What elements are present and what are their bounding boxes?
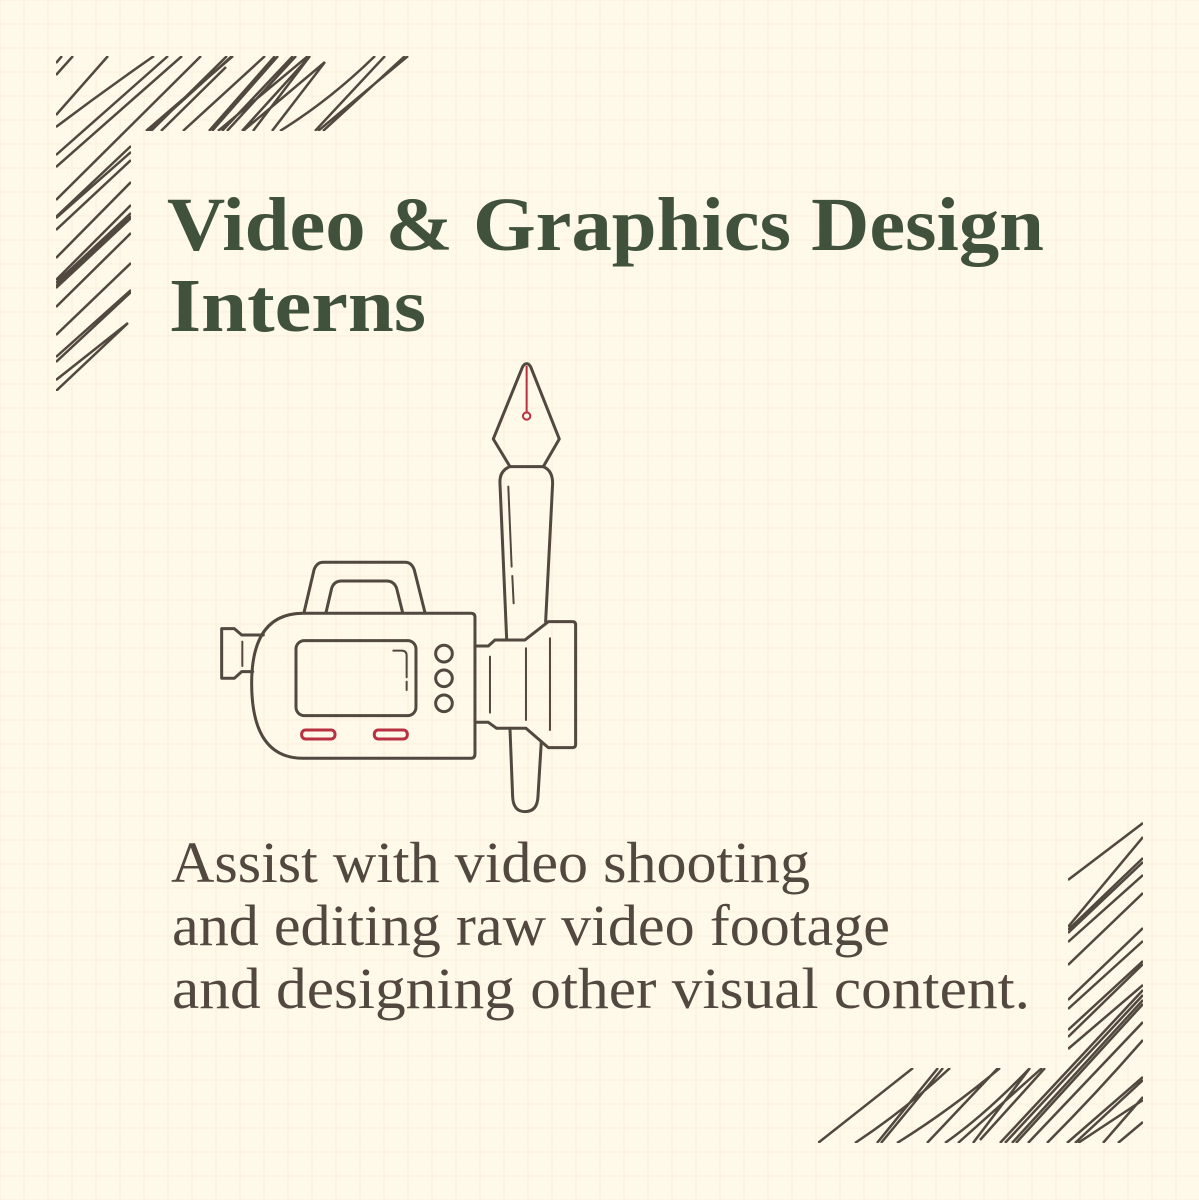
decorative hatch corner: top left (56, 56, 408, 391)
pen nib slit (523, 367, 530, 420)
pen barrel highlights (508, 487, 514, 603)
title: Video & Graphics Design (167, 183, 1044, 267)
icon: video camera and pen nib (222, 364, 576, 812)
body text (171, 830, 1030, 1021)
camera handle (304, 562, 425, 613)
camera eyepiece (222, 629, 263, 678)
body text: and designing other visual content. (172, 956, 1030, 1021)
camera buttons (436, 645, 452, 712)
camera lens (475, 622, 576, 748)
pen nib (493, 364, 559, 467)
title: Interns (169, 264, 426, 348)
screen glare (393, 651, 407, 690)
title (167, 183, 1044, 348)
body text: Assist with video shooting (171, 830, 810, 895)
pen barrel (500, 467, 553, 812)
decorative hatch corner: bottom right (818, 823, 1143, 1143)
red camera controls (302, 730, 407, 739)
body text: and editing raw video footage (172, 893, 890, 958)
camera body (252, 613, 475, 758)
camera screen (296, 641, 416, 716)
